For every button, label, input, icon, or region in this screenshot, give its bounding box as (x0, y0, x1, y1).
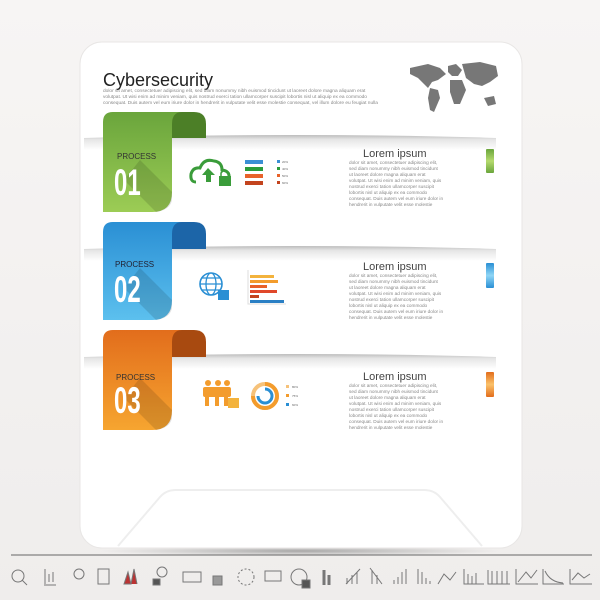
row 3 band (84, 354, 496, 369)
ribbon 03: PROCESS (116, 373, 155, 382)
text 2: dolor sit amet, consectetuer adipiscing elit, (349, 273, 437, 278)
card shadow (100, 546, 500, 556)
bar chart 2 (248, 270, 286, 304)
text 1: Lorem ipsum (363, 148, 427, 160)
text 1: dolor sit amet, consectetuer adipiscing elit, (349, 160, 437, 165)
people chart (245, 160, 288, 185)
text 2: hendrerit in vulputate velit esse molestie (349, 315, 433, 320)
ribbon 02: 02 (114, 269, 141, 310)
bar 1 (486, 149, 494, 173)
people chart: 50% (282, 174, 288, 178)
text 3: nostrud exerci tation ullamcorper suscipit (349, 407, 435, 412)
icon row (12, 567, 592, 588)
text 1: lobortis nisl ut aliquip ex ea commodo (349, 190, 428, 195)
bar 2 (486, 263, 494, 288)
ribbon 03 (103, 330, 206, 430)
text 3: sed diam nonummy nibh euismod tincidunt (349, 389, 439, 394)
text 1: nostrud exerci tation ullamcorper suscipit (349, 184, 435, 189)
text 1: sed diam nonummy nibh euismod tincidunt (349, 166, 439, 171)
text 1: consequat. Duis autem vel eum iriure dolor in (349, 196, 443, 201)
text 2: ut laoreet dolore magna aliquam erat (349, 285, 426, 290)
text 2: nostrud exerci tation ullamcorper suscipit (349, 297, 435, 302)
icon: people lock (203, 380, 239, 408)
text 3 (349, 371, 443, 430)
donut chart: 60% (292, 403, 298, 407)
intro text: dolor sit amet, consectetuer adipiscing elit, sed diam nonummy nibh euismod tincidunt ut laoreet dolore magna aliquam erat (103, 88, 366, 94)
text 3: ut laoreet dolore magna aliquam erat (349, 395, 426, 400)
text 2: sed diam nonummy nibh euismod tincidunt (349, 279, 439, 284)
text 1: hendrerit in vulputate velit esse molestie (349, 202, 433, 207)
ribbon 01: PROCESS (117, 152, 156, 161)
text 1: volutpat. Ut wisi enim ad minim veniam, quis (349, 178, 442, 183)
ribbon 01: 01 (114, 162, 141, 203)
row 2 band (84, 246, 496, 261)
text 3: lobortis nisl ut aliquip ex ea commodo (349, 413, 428, 418)
icon: globe lock (200, 273, 229, 300)
text 2: volutpat. Ut wisi enim ad minim veniam, quis (349, 291, 442, 296)
people chart: 60% (282, 181, 288, 185)
icon: cloud upload lock (191, 160, 231, 186)
intro text: volutpat. Ut wisi enim ad minim veniam, quis nostrud exerci tation ullamcorper suscipit lobortis nisl ut aliquip ex ea commodo (103, 94, 367, 100)
title: Cybersecurity (103, 70, 213, 90)
text 3: volutpat. Ut wisi enim ad minim veniam, quis (349, 401, 442, 406)
text 1: ut laoreet dolore magna aliquam erat (349, 172, 426, 177)
row 1 band (84, 135, 496, 150)
text 3: Lorem ipsum (363, 371, 427, 383)
donut chart (253, 384, 298, 408)
text 3: hendrerit in vulputate velit esse molestie (349, 425, 433, 430)
text 2: consequat. Duis autem vel eum iriure dolor in (349, 309, 443, 314)
intro text (103, 88, 378, 106)
text 2 (349, 261, 443, 320)
text 3: dolor sit amet, consectetuer adipiscing elit, (349, 383, 437, 388)
text 2: Lorem ipsum (363, 261, 427, 273)
text 1 (349, 148, 443, 207)
ribbon 03: 03 (114, 380, 141, 421)
ribbon 02: PROCESS (115, 260, 154, 269)
donut chart: 80% (292, 385, 298, 389)
text 2: lobortis nisl ut aliquip ex ea commodo (349, 303, 428, 308)
people chart: 40% (282, 167, 288, 171)
card panel (80, 42, 522, 548)
donut chart: 75% (292, 394, 298, 398)
text 3: consequat. Duis autem vel eum iriure dolor in (349, 419, 443, 424)
icon: world map (410, 62, 498, 112)
ribbon 01 (103, 112, 206, 212)
people chart: 20% (282, 160, 288, 164)
divider line (11, 554, 592, 556)
ribbon 02 (103, 222, 206, 320)
intro text: consequat. Duis autem vel eum iriure dolor in hendrerit in vulputate velit esse molestie consequat, vel illum dolore eu feugiat nulla (103, 100, 378, 106)
bar 3 (486, 372, 494, 397)
